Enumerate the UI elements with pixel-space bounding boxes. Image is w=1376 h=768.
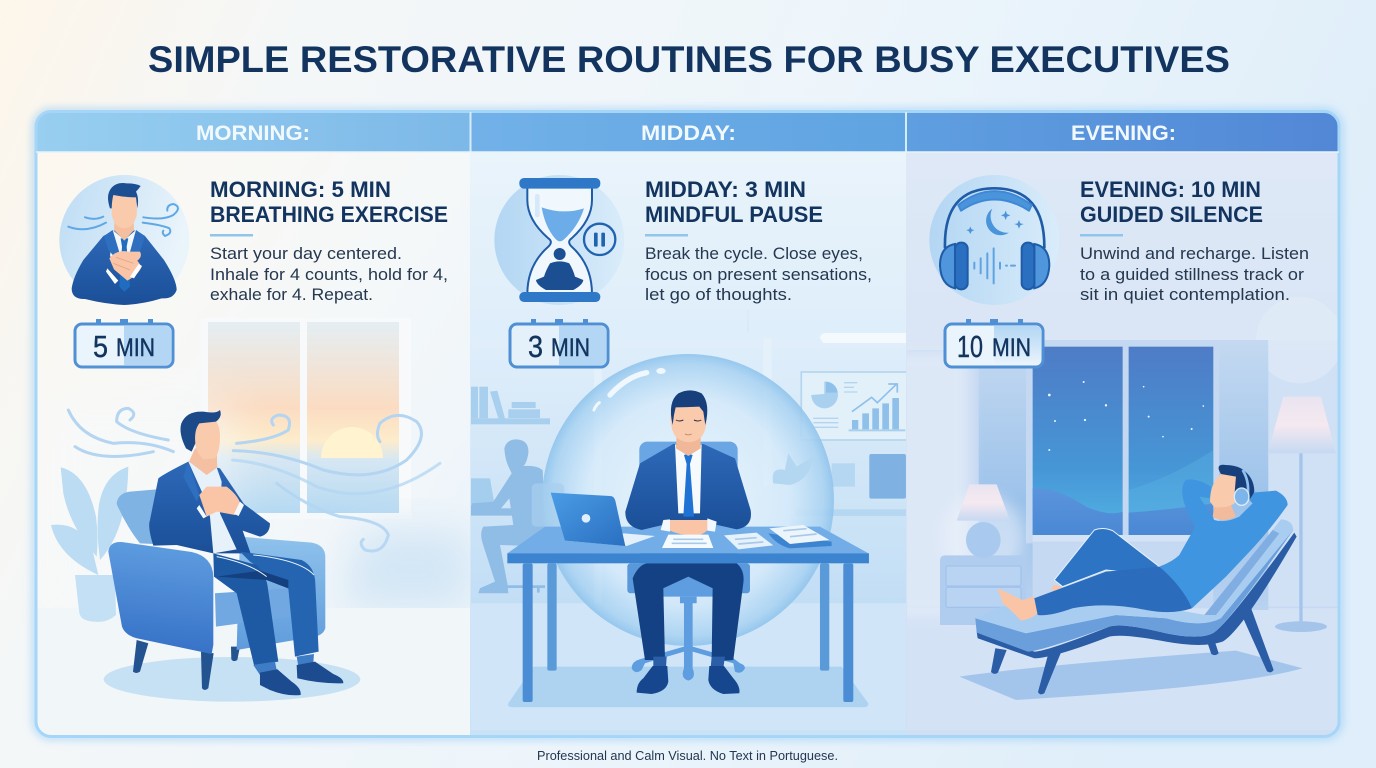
midday header: [471, 112, 906, 152]
midday timer badge: [510, 319, 608, 367]
wall haze: [340, 530, 470, 608]
executive meditating: [625, 390, 751, 694]
midday timer badge: MIN: [551, 334, 590, 362]
morning header: [36, 112, 470, 152]
shelf with books: [470, 387, 550, 424]
armchair front arm: [108, 542, 213, 654]
midday timer badge: 3: [528, 329, 543, 364]
evening body text: Unwind and recharge. Listen: [1080, 245, 1309, 263]
morning timer badge: [75, 319, 173, 367]
chair: [627, 442, 750, 681]
evening header: EVENING:: [1071, 122, 1176, 145]
plant: [51, 467, 128, 622]
night window: [1026, 340, 1219, 543]
midday scene: [470, 310, 1007, 730]
midday heading: MINDFUL PAUSE: [645, 202, 823, 227]
panel: morning: [36, 112, 470, 736]
midday body text: Break the cycle. Close eyes,: [645, 245, 863, 263]
breath swirls: [68, 408, 440, 551]
chaise longue: [975, 519, 1297, 694]
midday icon: hourglass: [494, 175, 624, 305]
panel frame glow: [35, 111, 1340, 737]
morning heading: BREATHING EXERCISE: [210, 202, 448, 227]
title: SIMPLE RESTORATIVE ROUTINES FOR BUSY EXECUTIVES: [148, 39, 1230, 80]
window with sunrise: [208, 322, 399, 513]
man relaxing with headphones: [998, 465, 1288, 621]
background colleague silhouette: [470, 439, 546, 593]
evening icon: headphones: [929, 175, 1059, 305]
evening heading: EVENING: 10 MIN: [1080, 177, 1261, 202]
morning body text: Start your day centered.: [210, 245, 402, 263]
chart board: [801, 372, 908, 440]
morning heading: [211, 182, 448, 222]
morning body text: Inhale for 4 counts, hold for 4,: [210, 266, 448, 284]
evening body text: sit in quiet contemplation.: [1080, 286, 1290, 304]
morning body text: [210, 245, 448, 304]
morning timer badge: 5: [93, 329, 108, 364]
midday body text: let go of thoughts.: [645, 286, 792, 304]
morning body text: exhale for 4. Repeat.: [210, 286, 373, 304]
floor lamp: [1268, 397, 1336, 632]
routine panels: [36, 112, 1343, 736]
panel: midday: [470, 113, 906, 734]
nightstand with lamp: [940, 484, 1027, 625]
morning header: MORNING:: [196, 122, 310, 145]
morning timer badge: MIN: [116, 334, 155, 362]
floor: [341, 608, 470, 630]
morning heading: MORNING: 5 MIN: [210, 177, 391, 202]
evening background: [906, 112, 1340, 736]
evening header: [907, 112, 1340, 152]
chaise shadow: [959, 651, 1303, 700]
desk: [507, 527, 869, 702]
midday header: MIDDAY:: [641, 122, 736, 145]
laptop: [551, 493, 655, 546]
desk papers: [662, 525, 832, 549]
floor mat: [508, 667, 868, 707]
evening body text: [1080, 245, 1309, 304]
office wall and floor: [470, 310, 1007, 730]
evening timer badge: MIN: [992, 334, 1031, 362]
evening body text: to a guided stillness track or: [1080, 266, 1305, 284]
morning scene: [51, 322, 470, 702]
midday background: [470, 112, 906, 736]
morning background: [38, 152, 44, 608]
evening heading: GUIDED SILENCE: [1080, 202, 1263, 227]
midday body text: focus on present sensations,: [645, 266, 872, 284]
evening timer badge: 10: [957, 329, 983, 364]
evening timer badge: [945, 319, 1043, 367]
panel: evening: [883, 112, 1343, 736]
executive legs: [213, 552, 343, 695]
footer note: Professional and Calm Visual. No Text in Portuguese.: [537, 749, 838, 763]
midday body text: [645, 245, 872, 304]
panel border and column dividers: [36, 112, 1339, 736]
midday heading: [646, 182, 822, 222]
room wall and floor: [906, 297, 1343, 730]
side haze: [883, 350, 969, 617]
calm bubble: [532, 354, 834, 646]
armchair back: [117, 489, 325, 690]
background desk and monitor: [832, 454, 906, 516]
morning icon: man breathing: [59, 175, 189, 305]
executive torso: [149, 410, 270, 553]
midday heading: MIDDAY: 3 MIN: [645, 177, 806, 202]
floor shadow: [104, 657, 360, 702]
curtains: [979, 340, 1033, 610]
evening scene: [883, 297, 1343, 730]
evening heading: [1080, 177, 1263, 227]
